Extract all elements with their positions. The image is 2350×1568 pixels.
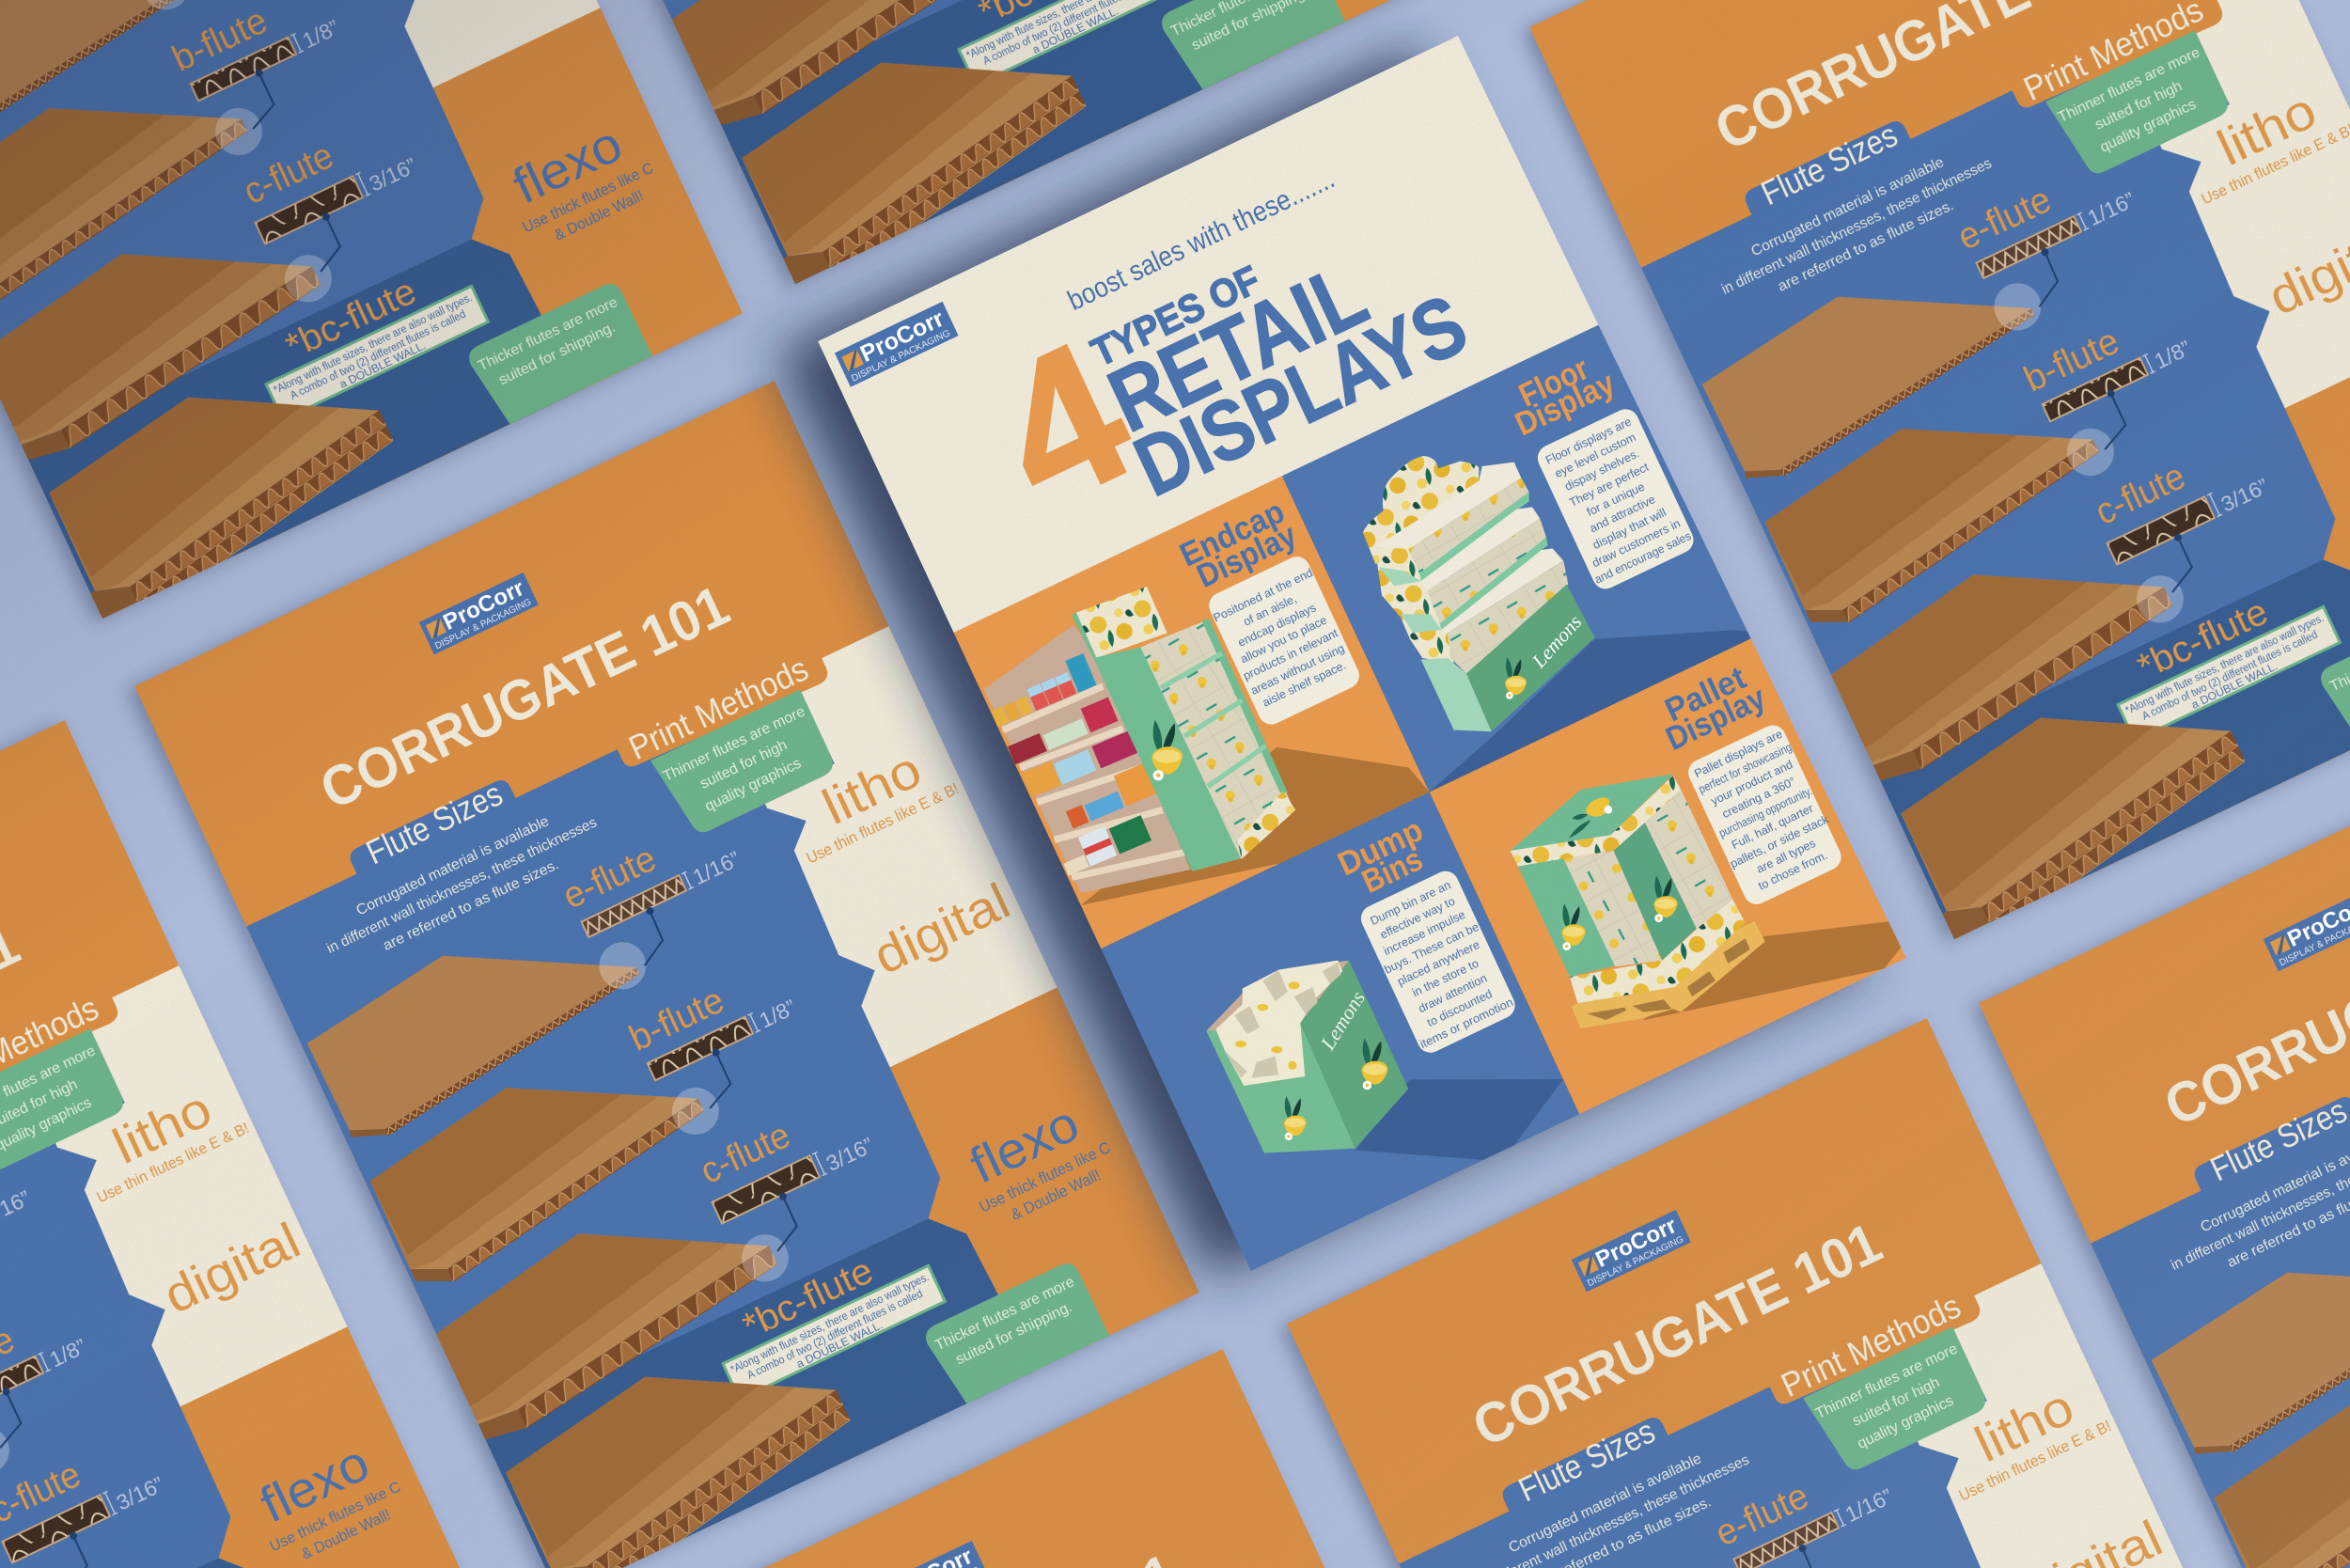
label: e-flute: 1/16” (689, 846, 744, 889)
illustration: dump bin: Lemons (1315, 987, 1370, 1055)
text: floor: and encourage sales (1592, 529, 1693, 587)
poster: corrugate 101 bottom right (1979, 698, 2350, 1568)
label: flexo: Use thick flutes like C (977, 1138, 1113, 1216)
note: double wall: A combo of two (2) different flutes is called (745, 1287, 925, 1382)
pointer: b-flute (654, 1047, 748, 1142)
label: c-flute: c-flute (695, 1115, 796, 1192)
text: endcap: Positoned at the end (1212, 566, 1315, 625)
text: dump bins: increase impulse (1382, 908, 1467, 958)
poster: corrugate 101 top left (0, 0, 749, 634)
text: floor: for a unique (1585, 480, 1647, 519)
text: pallet (1684, 719, 1849, 909)
text: thinner flutes: suited for high (697, 737, 790, 792)
illustration: floor display: Lemons (1528, 611, 1586, 673)
pointer: e-flute (584, 906, 680, 997)
panel: floor quadrant (1282, 317, 1763, 792)
text: pallet: perfect for showcasing (1697, 741, 1794, 796)
poster: corrugate 101 far left (0, 720, 496, 1568)
logo (835, 302, 959, 387)
text: pallet: are all types (1755, 837, 1818, 876)
text: endcap: products in relevant (1241, 626, 1340, 682)
heading: pallet display: Pallet (1659, 659, 1751, 729)
heading: pallet display (1650, 655, 1771, 758)
heading: endcap display: Endcap (1174, 493, 1290, 574)
panel: orange header (134, 381, 1199, 1568)
text: dump bins: Dump bin are an (1369, 878, 1453, 928)
label: flexo (952, 1087, 1122, 1235)
label: litho: litho (814, 741, 930, 836)
label: e-flute (556, 806, 744, 944)
label: e-flute: e-flute (556, 839, 663, 917)
text: dump bins: placed anywhere (1395, 938, 1481, 988)
text: pallet: purchasing opportunity. (1717, 784, 1814, 840)
panel: orange flexo area (864, 987, 1199, 1385)
heading: pallet display: Display (1660, 679, 1771, 758)
panel: dump bins quadrant (1101, 792, 1579, 1271)
text: pallet: Full, half, quarter (1730, 802, 1815, 852)
text: floor: eye level custom (1553, 431, 1637, 480)
label: flexo: & Double Wall! (1009, 1166, 1104, 1224)
text: pallet: pallets, or side stack (1728, 812, 1831, 870)
text: endcap (1205, 552, 1364, 729)
text: floor: display that will (1590, 506, 1668, 552)
text: thinner flutes (661, 703, 827, 825)
illustration: floor display (1363, 456, 1595, 731)
text: dump bins: buys. These can be (1383, 920, 1480, 977)
text: endcap: allow you to place (1238, 614, 1329, 666)
text: dump bins (1356, 867, 1519, 1057)
label: flexo: flexo (962, 1095, 1088, 1195)
title text: DISPLAYS (1121, 276, 1480, 515)
title: CORRUGATE 101 (311, 573, 738, 822)
poster: corrugate 101 top center (370, 0, 1442, 299)
text: flute intro: in different wall thicknesses, these thicknesses (324, 814, 600, 957)
board: e-flute (298, 882, 656, 1151)
label: b-flute: 1/8” (756, 995, 800, 1033)
label: digital: digital (866, 872, 1018, 985)
text: dump bins: to discounted (1425, 987, 1495, 1029)
illustration: dump bin (1206, 961, 1408, 1153)
label: litho: Use thin flutes like E & B! (804, 779, 962, 868)
illustration: pallet display (1511, 774, 1765, 1028)
label: bc-flute: *bc-flute (737, 1250, 879, 1347)
logo: DISPLAY & PACKAGING (850, 328, 952, 384)
illustration: endcap display (984, 587, 1295, 893)
text: floor (1533, 405, 1698, 593)
text: floor: Floor displays are (1543, 415, 1634, 467)
center poster shadow (776, 47, 1866, 1280)
text: pallet: Pallet displays are (1692, 728, 1785, 780)
panel: thin flutes note (650, 689, 838, 840)
heading: floor display: Display (1510, 365, 1621, 443)
label: b-flute: b-flute (623, 980, 730, 1059)
logo (419, 572, 539, 654)
text: endcap: of an aisle, (1242, 592, 1299, 629)
logo: ProCorr (856, 306, 948, 368)
text: thinner flutes: quality graphics (703, 756, 804, 815)
note: double wall: a DOUBLE WALL. (794, 1318, 885, 1371)
logo: ProCorr (439, 575, 528, 635)
text: dump bins: draw attention (1417, 971, 1489, 1015)
poster: corrugate 101 top right (1529, 0, 2350, 954)
text: thicker flutes: suited for shipping. (953, 1299, 1074, 1368)
label: b-flute (623, 953, 800, 1087)
text: dump bins: effective way to (1378, 895, 1457, 942)
text: endcap: aisle shelf space. (1261, 658, 1348, 710)
text: endcap: areas without using (1248, 641, 1346, 698)
heading: floor display: Floor (1513, 350, 1594, 415)
panel: dark blue bc-flute area (481, 1203, 1034, 1568)
heading: print methods: Print Methods (623, 649, 814, 767)
text: floor: They are perfect (1567, 461, 1651, 510)
text: thicker flutes: Thicker flutes are more (932, 1274, 1077, 1354)
label: c-flute (691, 1084, 877, 1228)
panel: pallet quadrant (1430, 633, 1913, 1114)
shadow: dump bin (1339, 1020, 1579, 1208)
text: pallet: creating a 360° (1720, 775, 1797, 821)
title number 4: 4 (964, 297, 1161, 550)
shadow: pallet (1633, 885, 1906, 1073)
panel: cream header (818, 25, 1617, 635)
text: pallet: your product and (1709, 758, 1794, 808)
board: c-flute (424, 1162, 794, 1447)
panel: print methods tab (613, 643, 831, 775)
text: floor: dispay shelves. (1562, 447, 1641, 494)
text: endcap: endcap displays (1236, 601, 1318, 650)
note: double wall: *Along with flute sizes, there are also wall types. (728, 1270, 931, 1376)
heading: dump bins: Bins (1356, 840, 1428, 901)
shadow: endcap (1056, 696, 1430, 949)
panel: thick flutes note (921, 1259, 1109, 1408)
shadow: floor (1402, 572, 1763, 792)
poster: corrugate 101 bottom center (1287, 1018, 2350, 1568)
tagline: boost sales with these....... (1063, 164, 1340, 317)
heading: flute sizes: Flute Sizes (360, 774, 508, 871)
board: b-flute (358, 1015, 724, 1296)
text: floor: and attractive (1588, 493, 1657, 535)
heading: endcap display: Display (1191, 516, 1303, 595)
label: c-flute: 3/16” (822, 1133, 877, 1176)
text: dump bins: items or promotion (1418, 996, 1515, 1051)
title text: RETAIL (1095, 244, 1381, 451)
panel: cream print area (720, 626, 1058, 1068)
title text (1078, 185, 1480, 515)
panel: blue flute sizes area (237, 646, 1103, 1568)
text: flute intro: Corrugated material is available (353, 813, 552, 919)
title text: TYPES OF (1085, 257, 1266, 375)
panel: endcap quadrant (953, 476, 1430, 949)
text: thinner flutes: Thinner flutes are more (661, 703, 807, 785)
text: pallet: to chose from. (1756, 849, 1829, 893)
text: dump bins: in the store to (1410, 957, 1480, 999)
text: flute intro: are referred to as flute sizes. (381, 856, 561, 954)
poster: 4 types of retail displays (818, 25, 1913, 1271)
heading: dump bins: Dump (1332, 811, 1429, 883)
text: floor: draw customers in (1590, 517, 1683, 570)
poster: corrugate 101 main (134, 381, 1206, 1568)
pointer: c-flute (722, 1191, 817, 1290)
logo: DISPLAY & PACKAGING (433, 597, 533, 651)
label: litho (780, 729, 962, 868)
board: bc-flute double wall (491, 1305, 872, 1568)
heading: dump bins (1332, 811, 1439, 907)
poster: corrugate 101 bottom partial (583, 1349, 1654, 1568)
